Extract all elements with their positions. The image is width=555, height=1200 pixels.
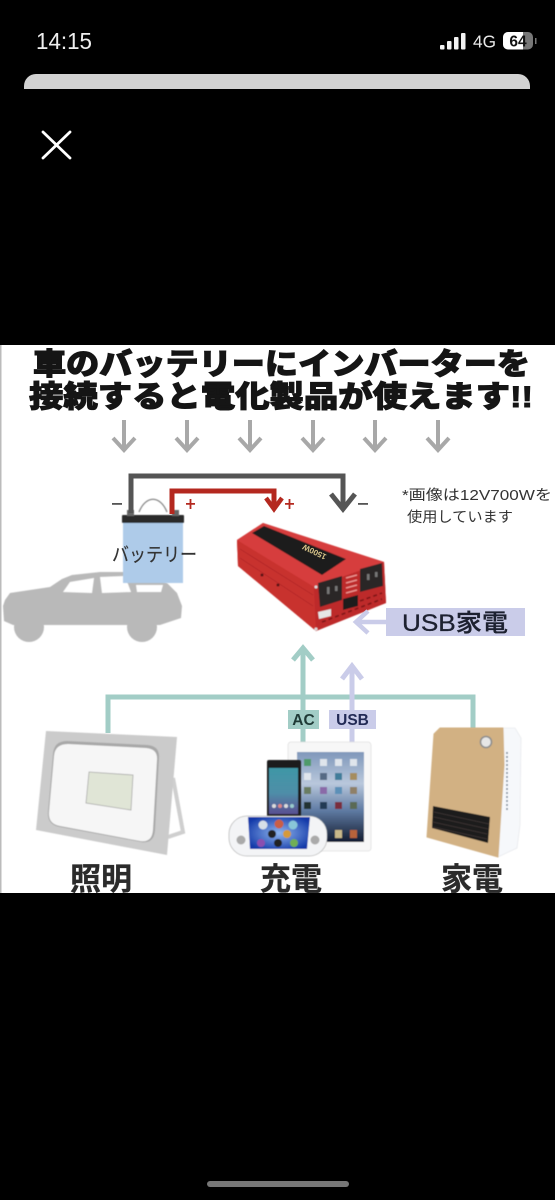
switch (343, 595, 358, 610)
printed rating: 1500W (301, 542, 328, 561)
title: 接続すると電化製品が使えます!! (29, 380, 533, 414)
floodlight (36, 731, 183, 855)
device captions (70, 862, 503, 897)
USB tag: USB (336, 712, 369, 729)
USB port (318, 609, 331, 619)
device captions: 照明 (70, 862, 132, 897)
vent slits (346, 575, 357, 593)
title: 車のバッテリーにインバーターを (33, 348, 530, 382)
icon: battery: 64 (509, 34, 527, 50)
device captions: 家電 (441, 862, 503, 897)
wires (131, 476, 355, 514)
note: 使用しています (407, 509, 513, 526)
screws (260, 574, 264, 576)
car silhouette (3, 572, 182, 642)
status bar (36, 28, 536, 54)
AC label: AC (292, 712, 315, 729)
devices (229, 742, 371, 856)
battery (122, 499, 184, 583)
title (29, 348, 533, 414)
inverter (237, 523, 386, 631)
heater (427, 728, 521, 857)
sockets (318, 576, 342, 607)
polarity marks (112, 499, 368, 509)
USB arrow (342, 666, 362, 743)
USB label: USB家電 (402, 610, 508, 637)
device captions: 充電 (260, 862, 322, 897)
home indicator (207, 1181, 349, 1187)
teal connector lines (108, 648, 473, 743)
note: *画像は12V700Wを (402, 487, 552, 504)
previous sheet edge (24, 74, 530, 89)
icon: signal bars (440, 33, 466, 50)
down arrows (113, 420, 449, 450)
network label: 4G (473, 32, 496, 52)
clock: 14:15 (36, 28, 92, 54)
panel: infographic image (0, 345, 555, 897)
lower black area (0, 893, 555, 1178)
icon: battery (503, 32, 536, 50)
icon: close (43, 132, 70, 158)
battery label: バッテリー (112, 545, 197, 566)
USB label (356, 608, 525, 637)
AC label (288, 710, 319, 729)
phone (267, 760, 301, 818)
positive wire (172, 491, 282, 514)
handheld console (229, 816, 327, 856)
negative wire (131, 476, 355, 513)
tablet (288, 742, 371, 851)
note (402, 487, 552, 526)
USB tag (329, 710, 376, 729)
